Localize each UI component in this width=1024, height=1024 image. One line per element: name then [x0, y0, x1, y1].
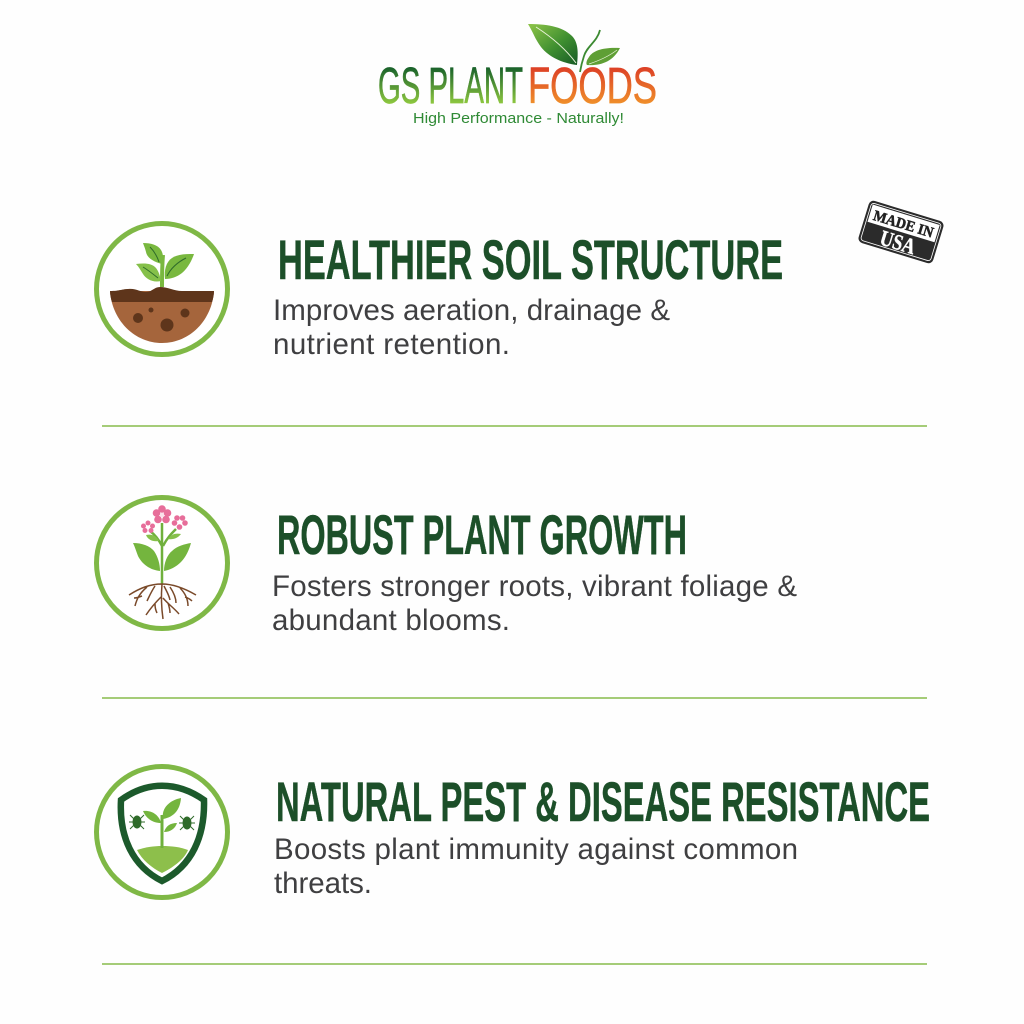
- body text: nutrient retention.: [273, 328, 510, 361]
- badge: made in USA: MADE IN: [871, 208, 935, 242]
- divider: [102, 425, 927, 427]
- panel: robust plant growth: [96, 498, 797, 637]
- body text: [274, 833, 798, 900]
- logo wordmark: FOODS: FOODS: [528, 57, 657, 114]
- body text: [273, 294, 670, 361]
- body text: Improves aeration, drainage &: [273, 294, 670, 327]
- body text: [272, 570, 797, 637]
- panel: healthier soil structure: [96, 224, 783, 361]
- panel: natural pest and disease resistance: [96, 766, 930, 900]
- badge: made in USA: [857, 200, 945, 265]
- divider: [102, 963, 927, 965]
- body text: Boosts plant immunity against common: [274, 833, 798, 866]
- icon: flowering plant with roots: [96, 498, 228, 628]
- icon: soil and seedling: [96, 224, 228, 354]
- logo wordmark: GS PLANT: GS PLANT: [378, 57, 523, 114]
- body text: Fosters stronger roots, vibrant foliage &: [272, 570, 797, 603]
- divider: [102, 697, 927, 699]
- icon: logo leaves: [528, 24, 620, 72]
- logo tagline: High Performance - Naturally!: [413, 110, 624, 127]
- body text: threats.: [274, 867, 372, 900]
- heading: ROBUST PLANT GROWTH: [277, 503, 687, 566]
- badge: made in USA: USA: [877, 225, 919, 259]
- icon: shield with plant and bugs: [96, 766, 228, 898]
- body text: abundant blooms.: [272, 604, 510, 637]
- logo: [378, 24, 657, 127]
